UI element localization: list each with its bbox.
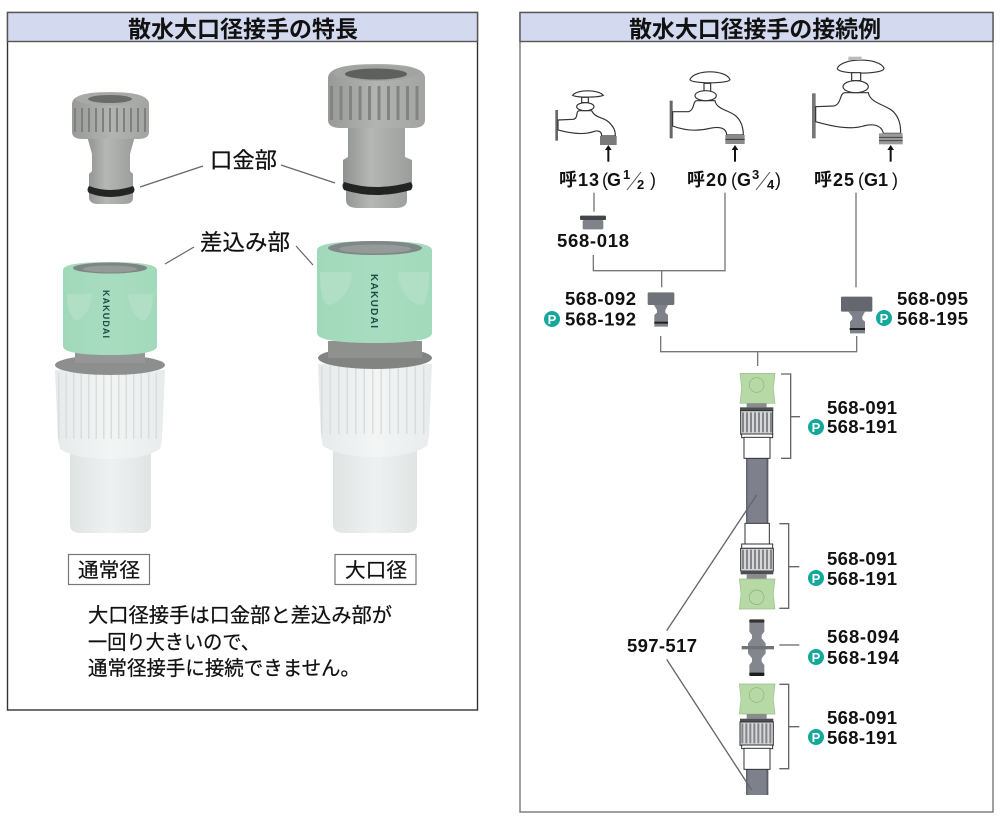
part numbers: third 568-091 / 568-191: P — [812, 730, 821, 745]
text: explanation: 通常径接手に接続できません。 — [88, 657, 360, 680]
label: size 20 — [687, 167, 781, 192]
photo: small tap adapter — [72, 92, 149, 204]
faucet size labels — [559, 167, 898, 192]
heading bar: features: 散水大口径接手の特長 — [128, 16, 358, 42]
label: size 20: 呼20 — [687, 170, 727, 190]
label: size 25: ( — [858, 170, 864, 190]
connector: middle — [739, 523, 775, 609]
label: size 20: 3 — [752, 167, 759, 182]
label box: large diameter — [335, 554, 416, 584]
icon: reducer 568-018 — [580, 216, 606, 229]
label: size 13: 呼13 — [559, 170, 599, 190]
part numbers: first 568-091 / 568-191: 568-191 — [827, 416, 897, 437]
part numbers: second 568-091 / 568-191 — [808, 548, 897, 589]
part numbers: 568-095 / 568-195: P — [880, 311, 889, 326]
part numbers: first 568-091 / 568-191: 568-091 — [827, 397, 897, 418]
label: size 25: ) — [892, 170, 898, 190]
part numbers: second 568-091 / 568-191: 568-091 — [827, 548, 897, 569]
label box: standard diameter — [68, 554, 150, 584]
icon: tap adapter 568-092 — [648, 292, 674, 327]
label: size 20: ( — [731, 170, 737, 190]
faucets — [555, 57, 903, 366]
part numbers: third 568-091 / 568-191: 568-091 — [827, 707, 897, 728]
text: explanation: 一回り大きいので、 — [88, 631, 260, 654]
part numbers: 568-092 / 568-192: 568-092 — [565, 288, 636, 309]
part numbers: 568-094 / 568-194: 568-094 — [827, 626, 900, 647]
icon: double nipple 568-094 — [742, 619, 774, 676]
leader lines: hose — [667, 495, 757, 790]
label: size 13: G — [607, 170, 621, 190]
photo: large tap adapter — [328, 64, 425, 208]
label: size 13: 2 — [637, 177, 644, 192]
part numbers: 568-092 / 568-192: 568-192 — [565, 308, 636, 330]
part numbers: 568-094 / 568-194: P — [812, 650, 821, 665]
text: explanation — [88, 604, 392, 680]
part numbers: 568-092 / 568-192: P — [548, 312, 557, 327]
part numbers: third 568-091 / 568-191: 568-191 — [827, 727, 897, 748]
part numbers: 568-095 / 568-195 — [876, 288, 968, 329]
label: size 13: ) — [650, 170, 656, 190]
part numbers: first 568-091 / 568-191: P — [812, 420, 821, 435]
part numbers: second 568-091 / 568-191: 568-191 — [827, 568, 897, 589]
part numbers: 568-092 / 568-192 — [544, 288, 636, 330]
label: size 20: G — [737, 170, 751, 190]
photo: large connector — [317, 241, 432, 533]
icon: faucet 25 — [812, 57, 903, 162]
label: size 20: 4 — [767, 177, 775, 192]
label: size 13: ( — [602, 170, 608, 190]
label box: large diameter: 大口径 — [345, 559, 407, 582]
brackets — [779, 374, 800, 769]
label: size 13: 1 — [623, 167, 630, 182]
label box: standard diameter: 通常径 — [78, 559, 140, 582]
part numbers: second 568-091 / 568-191: P — [812, 571, 821, 586]
label: size 20: ) — [775, 170, 781, 190]
part numbers: 568-094 / 568-194: 568-194 — [827, 647, 900, 668]
part numbers: 568-095 / 568-195: 568-095 — [897, 288, 968, 309]
label: size 13 — [559, 167, 656, 192]
label: insert part — [165, 230, 313, 265]
part numbers: third 568-091 / 568-191 — [808, 707, 897, 748]
part number: hose 597-517: 597-517 — [627, 635, 697, 656]
panel: connection example — [520, 12, 993, 812]
label: mouthpiece part: 口金部 — [210, 148, 277, 173]
icon: faucet 13 — [555, 91, 617, 162]
icon: tap adapter 568-095 — [841, 297, 872, 333]
part numbers: first 568-091 / 568-191 — [808, 397, 897, 437]
connector lines: faucets to adapters — [593, 193, 857, 366]
heading bar: features — [8, 12, 478, 42]
connector: bottom — [739, 684, 775, 795]
label: size 25 — [814, 170, 898, 190]
hose assembly — [667, 373, 800, 795]
part number: 568-018: 568-018 — [557, 230, 629, 251]
photo: large connector: KAKUDAI — [368, 274, 379, 328]
label: insert part: 差込み部 — [200, 230, 290, 255]
photo: standard connector: KAKUDAI — [101, 290, 111, 338]
label: mouthpiece part — [140, 148, 335, 187]
label: size 25: G1 — [864, 170, 888, 190]
connector: top — [740, 373, 775, 524]
heading bar: connection example — [520, 12, 993, 42]
photo: standard connector — [55, 262, 165, 533]
part numbers: 568-095 / 568-195: 568-195 — [897, 308, 968, 329]
icon: faucet 20 — [670, 72, 745, 162]
panel: features — [8, 12, 478, 710]
text: explanation: 大口径接手は口金部と差込み部が — [88, 604, 392, 627]
part numbers: 568-094 / 568-194 — [808, 626, 900, 668]
label: size 25: 呼25 — [814, 170, 854, 190]
heading bar: connection example: 散水大口径接手の接続例 — [629, 16, 881, 42]
